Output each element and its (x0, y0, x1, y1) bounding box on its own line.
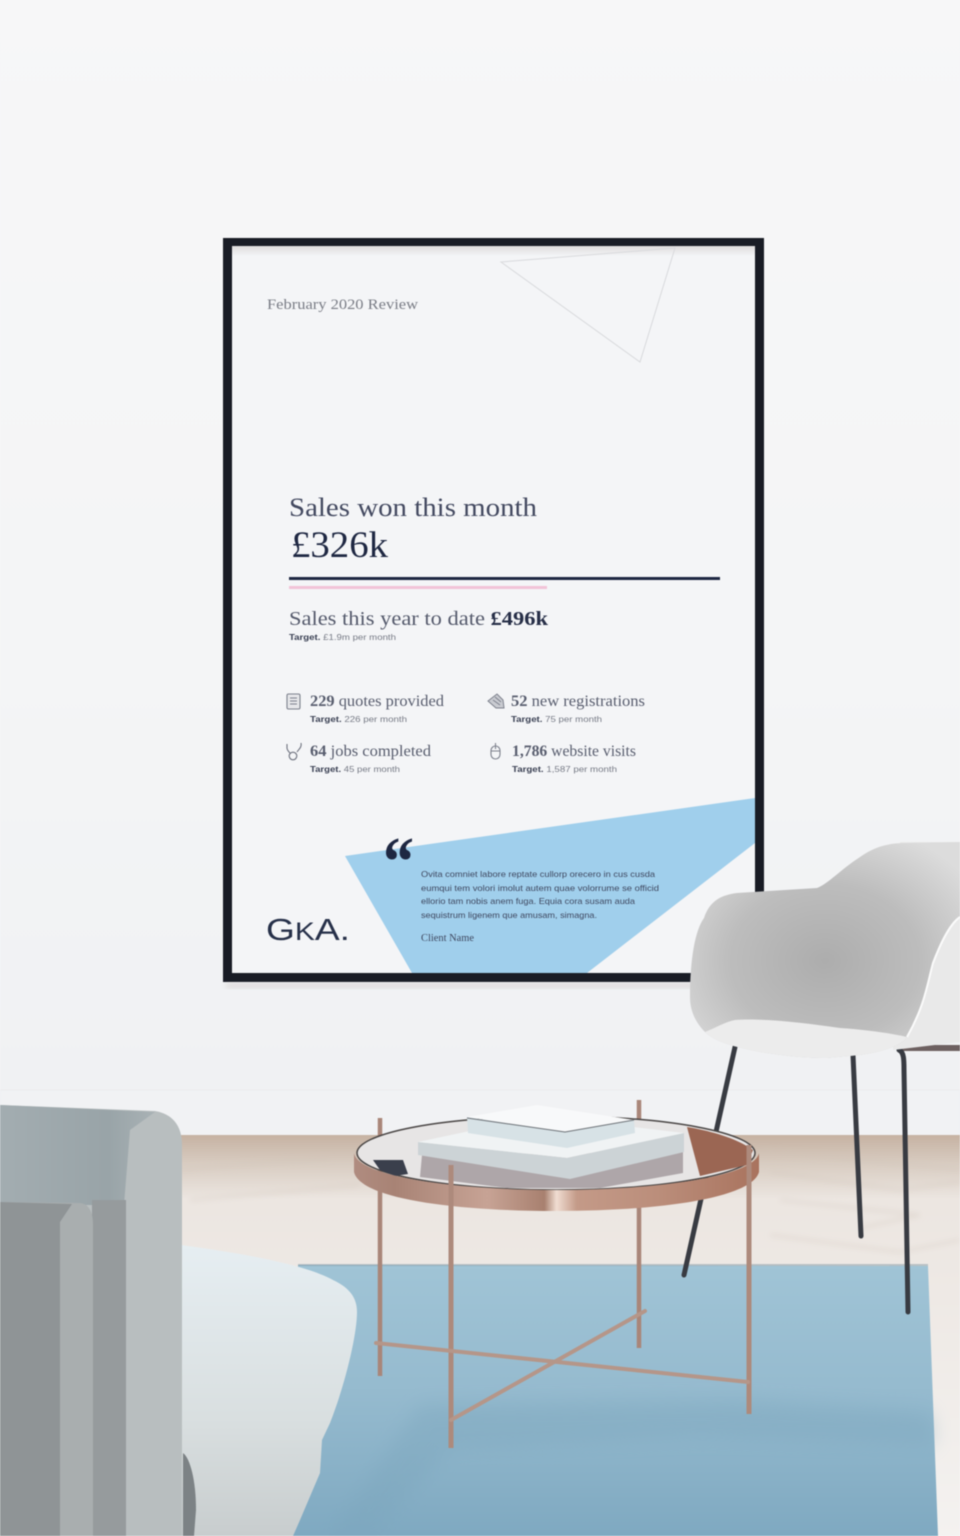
chair seat highlight (705, 1019, 907, 1058)
stat: quotes (287, 693, 444, 724)
chair shell (690, 842, 960, 1058)
icon: hand and paper (488, 694, 504, 708)
poster frame (223, 238, 764, 982)
testimonial text: sequistrum ligenem que amusam, simagna. (421, 910, 597, 920)
visits value: 1,786 website visits (512, 743, 636, 760)
chair legs (684, 1047, 908, 1312)
icon: stethoscope (287, 743, 301, 760)
icon: mouse (491, 743, 500, 759)
floor herringbone pattern (180, 1150, 960, 1252)
jobs value: 64 jobs completed (310, 743, 431, 760)
chair frame bar (897, 1045, 960, 1051)
testimonial text: Ovita comniet labore reptate cullorp orecero in cus cusda (421, 869, 655, 879)
coffee table (354, 1100, 759, 1448)
chair white edge (907, 917, 960, 1037)
quotes target: Target. 226 per month (310, 714, 407, 724)
wall (0, 0, 960, 1136)
cushion base shadow (183, 1453, 196, 1536)
progress bar (289, 577, 720, 589)
rug shadow (330, 1400, 935, 1536)
stat: registrations (488, 693, 645, 724)
sofa back top (0, 1105, 155, 1205)
logo: GKA: GKA. (266, 912, 350, 947)
table rear legs (380, 1100, 639, 1376)
icon: document (287, 694, 300, 709)
floor (0, 1135, 960, 1536)
sofa tweed band (92, 1200, 126, 1536)
sofa arm (0, 1202, 93, 1536)
chair back right (893, 842, 960, 1050)
registrations value: 52 new registrations (511, 693, 645, 710)
visits target: Target. 1,587 per month (512, 764, 617, 774)
testimonial text (421, 869, 659, 920)
sofa (0, 1105, 357, 1536)
book reflection (420, 1152, 683, 1188)
table rim (354, 1153, 759, 1211)
testimonial text: ellorio tam nobis anem fuga. Equia cora susam auda (421, 896, 635, 906)
figure: sales won value: £326k (291, 525, 389, 566)
review date: February 2020 Review (267, 297, 418, 313)
registrations target: Target. 75 per month (511, 714, 602, 724)
heading: sales won: Sales won this month (289, 493, 537, 522)
table cross bars (376, 1311, 748, 1420)
stat: website visits (491, 743, 636, 774)
frame shadow (226, 983, 696, 988)
chair (684, 842, 960, 1312)
decorative outline triangle (501, 248, 675, 362)
jobs target: Target. 45 per month (310, 764, 400, 774)
blue quote shape (345, 798, 755, 973)
quotes value: 229 quotes provided (310, 693, 444, 710)
dark reflection (373, 1160, 408, 1176)
right reflection (687, 1127, 753, 1176)
table front legs (451, 1145, 749, 1448)
icon: quotation mark: “ (383, 824, 414, 901)
sofa cushion (181, 1245, 357, 1536)
sofa back (0, 1105, 182, 1536)
client name: Client Name (421, 933, 475, 944)
skirting board (0, 1090, 960, 1136)
rug (290, 1264, 938, 1536)
year target: Target. £1.9m per month (289, 632, 396, 642)
year to date text: Sales this year to date £496k (289, 608, 549, 630)
table top glass (357, 1116, 755, 1190)
testimonial text: eumqui tem volori imolut autem quae volorrume se officid (421, 883, 659, 893)
stat: jobs (287, 743, 431, 774)
lower book (418, 1116, 684, 1179)
sofa arm front (0, 1202, 72, 1536)
upper book (467, 1105, 635, 1148)
rug top fringe (298, 1264, 928, 1266)
